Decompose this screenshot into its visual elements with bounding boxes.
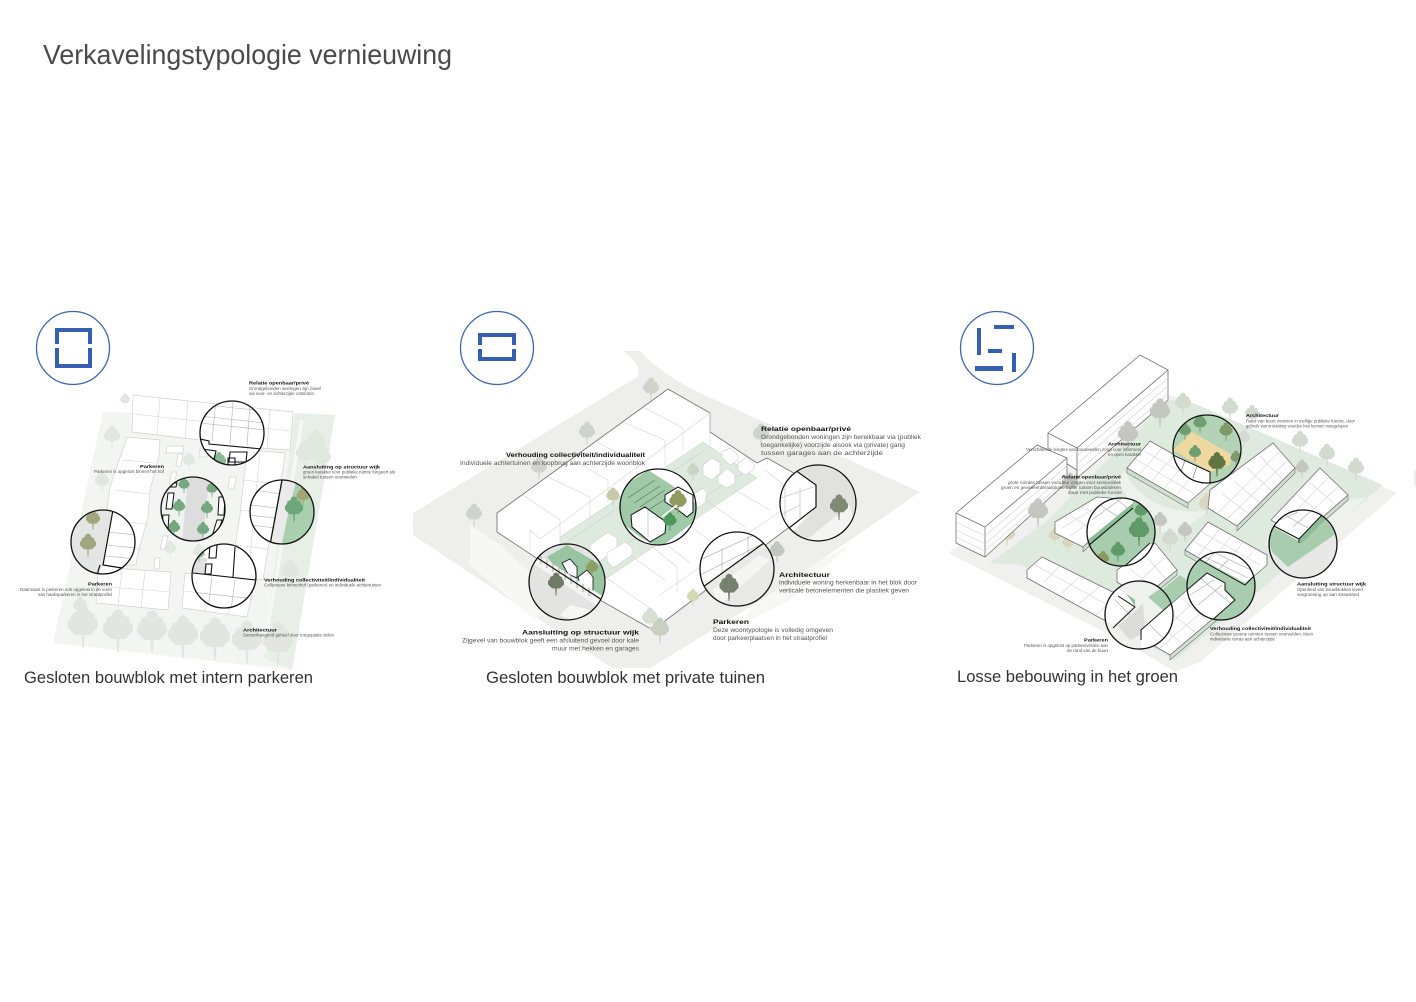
- annotation: aansluiting op structuur wijk: [303, 464, 396, 480]
- annotation: verhouding collectiviteit: [264, 578, 382, 588]
- panel: gesloten bouwblok met intern parkeren: [20, 312, 396, 687]
- annotation: architectuur: Samenhangend geheel door toegepaste delen: [243, 632, 335, 638]
- annotation: relatie openbaar/prive: Grondgebonden woningen zijn zowel: [249, 386, 321, 391]
- annotation: architectuur: [779, 572, 918, 594]
- annotation: verhouding collectiviteit: Collectieve binnenhof (parkeren) en individuele achtertuinen: [264, 582, 382, 588]
- annotation: relatie openbaar/prive: Relatie openbaar/privé: [761, 426, 851, 433]
- annotation: architectuur rand: Architectuur: [1246, 413, 1279, 418]
- annotation: architectuur lengtes: Architectuur: [1108, 442, 1141, 446]
- annotation: relatie openbaar/prive: Grondgebonden woningen zijn bereikbaar via (publiek: [761, 434, 922, 441]
- annotation: parkeren straat: Daarnaast is parkeren ook opgelost in de vorm: [20, 587, 112, 592]
- annotation: architectuur: Architectuur: [779, 572, 830, 579]
- annotation: parkeren: [713, 619, 833, 642]
- detail circle: relatie openbaar/prive: [1086, 497, 1156, 567]
- detail circle: parkeren hof: [161, 476, 225, 542]
- annotation: architectuur: verticale betonelementen die plastiek geven: [779, 588, 909, 594]
- annotation: aansluiting structuur wijk: vergroening op aan straatrand: [1297, 592, 1360, 597]
- caption: Gesloten bouwblok met private tuinen: [486, 668, 765, 687]
- annotation: parkeren straat: Parkeren: [88, 582, 112, 586]
- annotation: verhouding collectiviteit: Collectieve groene ruimten tussen voorvelden. Mein: [1210, 632, 1314, 636]
- isometric drawing: [948, 355, 1397, 672]
- detail circle: architectuur: [700, 530, 776, 610]
- annotation: relatie openbaar/prive: toegankelijke) voorzijde alsook via (private) gang: [761, 442, 905, 449]
- icon: courtyard block: [460, 312, 534, 384]
- detail circle: relatie openbaar/prive: [779, 464, 857, 542]
- courtyard: [560, 442, 757, 578]
- row houses: [1027, 441, 1348, 660]
- detail circle: aansluiting op structuur wijk: [249, 479, 315, 545]
- courtyard houses: [590, 448, 755, 568]
- annotation: parkeren straat: [20, 582, 112, 597]
- street patches: [470, 525, 850, 625]
- annotation: relatie openbaar/prive: groen en gevarieerde/autoluwe buffer tussen bouwblokken: [1001, 485, 1122, 490]
- annotation: relatie openbaar/prive: Relatie openbaar/privé: [249, 380, 310, 386]
- annotation: architectuur lengtes: en open karakter: [1108, 452, 1142, 457]
- building blocks: [96, 395, 293, 617]
- annotation: aansluiting op structuur wijk: Zijgevel van bouwblok geeft een afsluitend gevoel door kale: [462, 638, 639, 644]
- annotation: verhouding collectiviteit: Verhouding collectiviteit/individualiteit: [264, 578, 366, 582]
- annotation: aansluiting op structuur wijk: Aansluiting op structuur wijk: [303, 464, 381, 470]
- annotation: relatie openbaar/prive: [249, 380, 321, 396]
- annotation: parkeren hof: Parkeren is opgelost binnen het hof: [94, 469, 165, 474]
- detail circle: relatie openbaar/prive: [200, 400, 265, 472]
- isometric site ground: [413, 351, 920, 668]
- icon: loose buildings: [960, 312, 1034, 384]
- detail circle: parkeren: [1104, 580, 1174, 650]
- caption: Losse bebouwing in het groen: [957, 667, 1178, 686]
- slab buildings: [956, 355, 1168, 557]
- detail circle: aansluiting op structuur wijk: [529, 544, 605, 625]
- annotation: verhouding collectiviteit: Verhouding collectiviteit/individualiteit: [506, 452, 646, 459]
- annotation: relatie openbaar/prive: [761, 426, 922, 457]
- annotation: verhouding collectiviteit: [460, 452, 646, 467]
- panel: gesloten bouwblok met private tuinen: [413, 312, 922, 687]
- annotation: parkeren: Parkeren is opgelost op parkeervelden aan: [1024, 643, 1109, 648]
- annotation: relatie openbaar/prive: tussen garages aan de achterzijde: [761, 450, 883, 457]
- annotation: parkeren: Parkeren: [713, 619, 749, 626]
- panel: losse bebouwing in het groen: [948, 312, 1397, 686]
- title: Verkavelingstypologie vernieuwing: [43, 39, 452, 70]
- annotation: architectuur rand: [1246, 413, 1356, 428]
- annotation: aansluiting op structuur wijk: schakel tussen voorwielen: [303, 474, 358, 480]
- annotation: relatie openbaar/prive: grote ruimtes tussen voordeur zorgen voor semipubliek: [1008, 480, 1122, 485]
- detail circle: architectuur: [1172, 414, 1242, 485]
- annotation: relatie openbaar/prive: Relatie openbaar/privé: [1062, 474, 1122, 480]
- annotation: verhouding collectiviteit: individuele terras aan achterzijde: [1210, 636, 1276, 642]
- annotation: parkeren: door parkeerplaatsen in het straatprofiel: [713, 635, 827, 642]
- detail circle: aansluiting structuur wijk: [1266, 505, 1337, 578]
- annotation: architectuur rand: Rand van buurt voorzien in meilige publieke functie, door: [1246, 418, 1356, 424]
- isometric drawing: [466, 377, 856, 643]
- annotation: verhouding collectiviteit: Verhouding collectiviteit/individualiteit: [1210, 626, 1312, 631]
- annotation: architectuur: Architectuur: [243, 628, 277, 632]
- annotation: parkeren: Parkeren: [1084, 638, 1108, 642]
- annotation: parkeren: [1024, 638, 1109, 653]
- detail circle: verhouding collectiviteit: [618, 469, 698, 548]
- annotation: aansluiting structuur wijk: Aansluiting structuur wijk: [1297, 582, 1367, 586]
- annotation: parkeren: Deze woontypologie is volledig omgeven: [713, 627, 833, 634]
- annotation: parkeren hof: Parkeren: [140, 464, 164, 469]
- icon: closed block: [36, 312, 110, 384]
- annotation: parkeren straat: van haaksparkeren in het straatprofiel: [38, 592, 112, 597]
- annotation: architectuur lengtes: [1026, 442, 1142, 457]
- annotation: aansluiting structuur wijk: Openheid van bouwblokken levert: [1297, 587, 1364, 592]
- annotation: architectuur lengtes: Verschillende lengtes van bouwvelden zorgt voor informeel: [1026, 447, 1141, 452]
- annotation: aansluiting op structuur wijk: [462, 630, 640, 652]
- annotation: parkeren: de rand van de buurt: [1067, 648, 1109, 653]
- site plan drawing: [53, 393, 335, 670]
- annotation: aansluiting op structuur wijk: Aansluiting op structuur wijk: [522, 630, 639, 636]
- annotation: relatie openbaar/prive: maar met publieke functie: [1068, 490, 1123, 495]
- annotation: aansluiting op structuur wijk: muur met hekken en garages: [552, 646, 640, 652]
- detail circle: parkeren straat: [70, 510, 136, 575]
- annotation: architectuur rand: gebruik van ontsluiting voorden hen kunnen meegelopen: [1246, 424, 1349, 428]
- annotation: aansluiting op structuur wijk: groen karakter voor publieke ruimte fungeert als: [303, 470, 396, 474]
- detail circle: verhouding collectiviteit: [1186, 551, 1256, 621]
- annotation: aansluiting structuur wijk: [1297, 582, 1367, 597]
- annotation: verhouding collectiviteit: [1210, 626, 1314, 642]
- caption: Gesloten bouwblok met intern parkeren: [24, 668, 313, 687]
- annotation: parkeren hof: [94, 464, 165, 474]
- annotation: architectuur: [243, 628, 335, 638]
- annotation: verhouding collectiviteit: Individuele achtertuinen en loopbrug aan achterzijde woonblok: [460, 460, 646, 467]
- annotation: relatie openbaar/prive: via voor- en achterzijde ontsloten: [249, 391, 315, 396]
- darker trees: [1028, 398, 1308, 542]
- annotation: architectuur: individuele woning herkenbaar in het blok door: [779, 580, 918, 586]
- annotation: relatie openbaar/prive: [1001, 474, 1123, 495]
- house divisions: [523, 408, 815, 630]
- detail circle: verhouding collectiviteit: [190, 544, 256, 610]
